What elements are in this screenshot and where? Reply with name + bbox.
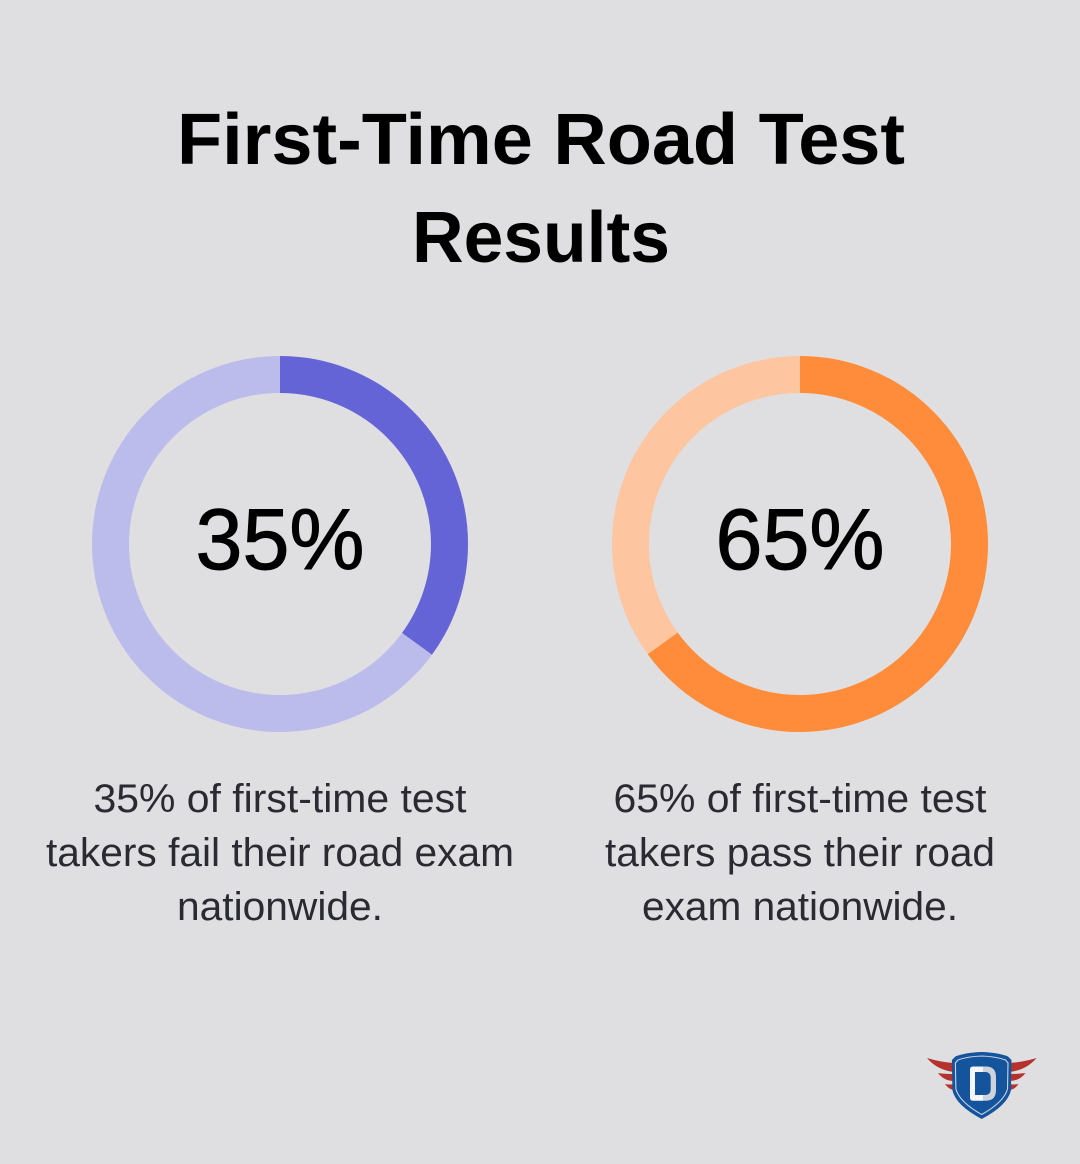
icon: shield outline	[955, 1056, 1008, 1114]
value: 35%: 35%	[196, 492, 364, 588]
title	[177, 100, 905, 278]
description: pass	[605, 777, 995, 929]
value: 65%: 65%	[716, 492, 884, 588]
donut chart: 65% pass	[630, 374, 970, 714]
panel: pass rate	[605, 374, 995, 929]
icon: right wing	[1008, 1058, 1036, 1090]
description: pass: 65% of first-time test	[614, 777, 986, 821]
donut chart: 35% fail	[110, 374, 450, 714]
icon: shield	[952, 1052, 1012, 1119]
description: pass: takers pass their road	[605, 831, 995, 875]
icon: letter D	[970, 1066, 996, 1101]
description: pass: exam nationwide.	[642, 885, 958, 929]
title: Results	[412, 198, 670, 278]
description: fail	[46, 777, 514, 929]
title: First-Time Road Test	[177, 100, 905, 180]
description: fail: takers fail their road exam	[46, 831, 514, 875]
description: fail: 35% of first-time test	[94, 777, 466, 821]
panel: fail rate	[46, 374, 514, 929]
description: fail: nationwide.	[177, 885, 383, 929]
icon: left wing	[927, 1058, 955, 1090]
icon: winged shield logo	[927, 1052, 1036, 1119]
